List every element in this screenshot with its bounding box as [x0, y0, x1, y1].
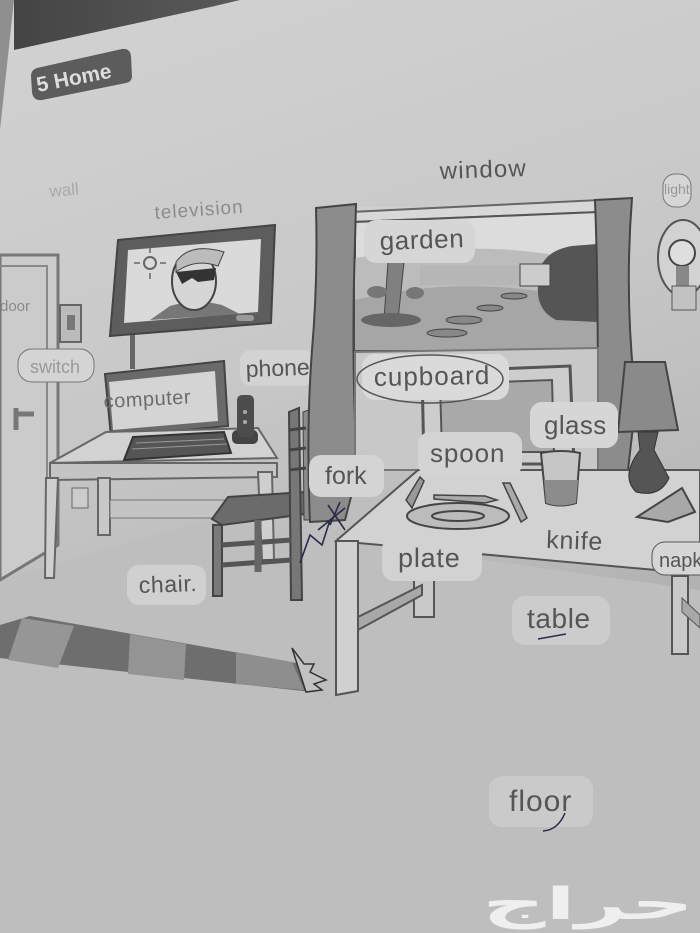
napkin — [637, 488, 695, 522]
wall label: wall — [48, 180, 80, 201]
phone label — [240, 350, 314, 386]
spoon label — [418, 432, 522, 476]
floor — [0, 520, 700, 933]
rug — [0, 616, 326, 692]
television — [110, 225, 275, 336]
knife label — [538, 524, 612, 558]
wall light — [658, 220, 700, 310]
cupboard label — [357, 354, 509, 403]
plate label — [382, 537, 482, 581]
napkin label — [652, 542, 700, 575]
chair — [212, 408, 310, 600]
spoon label: spoon — [430, 438, 505, 468]
fork label: fork — [325, 462, 367, 490]
computer monitor: computer — [103, 386, 192, 413]
garden label: garden — [379, 223, 465, 256]
phone — [232, 395, 258, 444]
door: door — [0, 298, 30, 315]
glass label — [530, 402, 618, 448]
top dark band — [14, 0, 240, 50]
section heading: 5 Home — [35, 60, 113, 97]
floor label — [489, 776, 593, 831]
right curtain — [595, 198, 636, 470]
keyboard — [124, 432, 231, 460]
plate — [407, 503, 509, 529]
chair label: chair. — [138, 570, 198, 598]
drinking glass — [541, 451, 580, 506]
glass label: glass — [544, 410, 607, 440]
garden scene — [361, 244, 597, 337]
phone label: phone — [245, 354, 310, 382]
chair label — [127, 565, 206, 605]
switch label: switch — [30, 357, 80, 377]
cupboard — [355, 348, 598, 470]
computer monitor — [103, 361, 228, 437]
table label — [512, 596, 610, 645]
fork label — [309, 455, 384, 497]
cupboard label: cupboard — [374, 360, 491, 392]
light label — [663, 174, 691, 207]
window label: window — [438, 155, 527, 185]
watermark: حراج — [482, 879, 694, 930]
door — [0, 255, 58, 580]
table label: table — [527, 603, 591, 634]
desk — [45, 428, 277, 578]
garden label — [364, 220, 475, 263]
section heading — [31, 49, 132, 100]
socket — [72, 488, 88, 508]
switch label — [18, 349, 94, 382]
page edge — [0, 0, 14, 130]
lamp — [618, 362, 678, 493]
window — [350, 200, 600, 465]
television stand — [130, 335, 135, 369]
left curtain — [308, 204, 358, 522]
knife label: knife — [546, 526, 604, 556]
plate label: plate — [398, 543, 461, 573]
pen scribble — [300, 502, 345, 563]
cutlery — [406, 477, 527, 522]
light label: light — [664, 181, 690, 197]
table — [336, 470, 700, 695]
floor label: floor — [509, 785, 572, 818]
television label: television — [154, 197, 244, 224]
light switch — [60, 305, 81, 342]
